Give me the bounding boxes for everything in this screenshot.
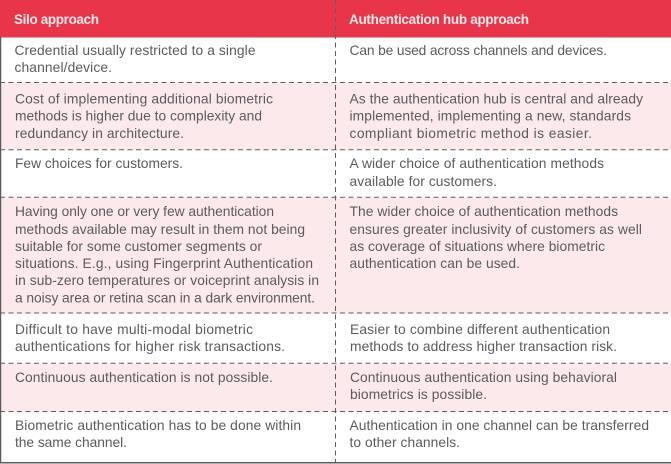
silo cell 5 [15,322,285,354]
row 3 [15,156,604,189]
silo cell 5: Difficult to have multi-modal biometric [15,322,253,337]
silo cell 4: Having only one or very few authentication [15,204,274,219]
hub cell 5 [350,322,617,354]
silo cell 7 [15,418,301,450]
heading: silo approach: Silo approach [14,12,99,27]
hub cell 5: methods to address higher transaction risk. [350,339,617,354]
silo cell 4 [15,204,319,306]
silo cell 4: suitable for some customer segments or [15,239,262,254]
hub cell 2: implemented, implementing a new, standards [350,108,631,124]
silo cell 1 [14,43,256,75]
hub cell 2: compliant biometric method is easier. [350,126,592,141]
silo cell 4: in sub-zero temperatures or voiceprint analysis in [15,273,319,288]
silo cell 4: methods available may result in them not being [15,222,305,237]
hub cell 4 [350,204,642,271]
hub cell 4: The wider choice of authentication methods [350,204,618,219]
hub cell 3: A wider choice of authentication methods [350,156,604,171]
silo cell 3: Few choices for customers. [15,156,183,171]
heading: authentication hub approach: Authentication hub approach [349,12,529,27]
silo cell 4: a noisy area or retina scan in a dark environment. [15,290,315,306]
hub cell 5: Easier to combine different authentication [350,322,610,337]
row 7 [15,418,649,450]
hub cell 6: Continuous authentication using behavioral [350,370,617,385]
hub cell 1: Can be used across channels and devices. [350,43,607,58]
silo cell 7: Biometric authentication has to be done within [15,418,301,433]
hub cell 4: authentication can be used. [350,256,520,271]
silo cell 7: the same channel. [15,435,127,450]
hub cell 6 [350,370,617,402]
silo cell 4: situations. E.g., using Fingerprint Authentication [15,256,313,271]
silo cell 5: authentications for higher risk transactions. [15,339,285,354]
hub cell 4: ensures greater inclusivity of customers as well [350,222,642,237]
row 5 [15,322,617,354]
hub cell 3: available for customers. [350,174,497,189]
silo cell 2: redundancy in architecture. [15,126,184,141]
silo cell 2 [15,92,273,141]
silo cell 1: channel/device. [14,60,112,75]
hub cell 7 [350,418,649,450]
hub cell 2: As the authentication hub is central and already [350,92,643,106]
silo cell 2: Cost of implementing additional biometric [15,92,273,106]
hub cell 6: biometrics is possible. [350,387,487,402]
silo cell 1: Credential usually restricted to a single [14,43,256,58]
hub cell 4: as coverage of situations where biometric [350,239,605,254]
row 1 [14,43,607,75]
hub cell 3 [350,156,604,189]
header band [0,0,671,38]
hub cell 7: to other channels. [350,435,460,450]
hub cell 7: Authentication in one channel can be transferred [350,418,649,433]
row 2 [15,92,643,141]
silo cell 6: Continuous authentication is not possible. [15,370,273,385]
row 6 [15,370,617,402]
row 4 [15,204,642,306]
silo cell 2: methods is higher due to complexity and [15,108,262,124]
row backgrounds [0,83,671,412]
hub cell 2 [350,92,643,141]
